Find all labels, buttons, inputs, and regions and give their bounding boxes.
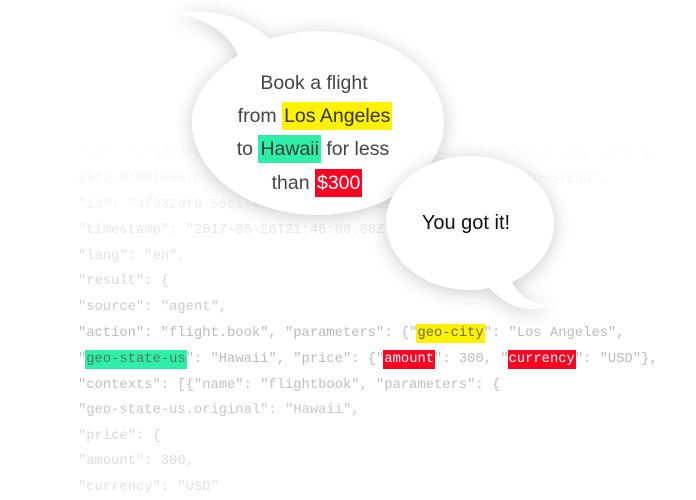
- line: to Hawaii for less: to Hawaii for less: [237, 138, 389, 160]
- background: JSON code listing: "action": "flight.book", "parameters": {"geo-city": "Los Angeles",: [78, 326, 624, 341]
- background: JSON code listing: "result": {: [78, 274, 169, 289]
- reply text: You got it!: You got it!: [422, 212, 510, 234]
- background: JSON code listing: "id": "4f932df9-56c1-4d0e-a9f2-9c88f0557caa",: [78, 198, 451, 213]
- line: Book a flight: Book a flight: [260, 72, 368, 94]
- background: JSON code listing: "timestamp": "2017-05-26T21:46:08.88Z",: [78, 223, 401, 238]
- background: JSON code listing: "lang": "en",: [78, 249, 186, 264]
- request text: [237, 72, 392, 197]
- background: JSON code listing: a9f2-9c88f0557caa", "i": "4f932df9-56c1-4d0e-a9f2-9c88f0557caa",: [78, 172, 608, 187]
- line: than $300: than $300: [272, 172, 360, 194]
- line: from Los Angeles: from Los Angeles: [238, 105, 390, 127]
- background: JSON code listing: "id": "4f932df9-56c1-4d0e-a9f2-9c88f0557caa-4f932df9-56c1-4d0e-a9f2-9c: [78, 147, 658, 162]
- background: JSON code listing: "price": {: [78, 429, 161, 444]
- background: JSON code listing: "contexts": [{"name": "flightbook", "parameters": {: [78, 378, 500, 393]
- background: JSON code listing: "currency": "USD": [78, 480, 219, 495]
- background: JSON code listing: "source": "agent",: [78, 300, 227, 315]
- background: JSON code listing: "amount": 300,: [78, 454, 194, 469]
- background: JSON code listing: "geo-state-us.original": "Hawaii",: [78, 403, 360, 418]
- background: JSON code listing: "geo-state-us": "Hawaii", "price": {"amount": 300, "currency": "USD"},: [78, 352, 658, 367]
